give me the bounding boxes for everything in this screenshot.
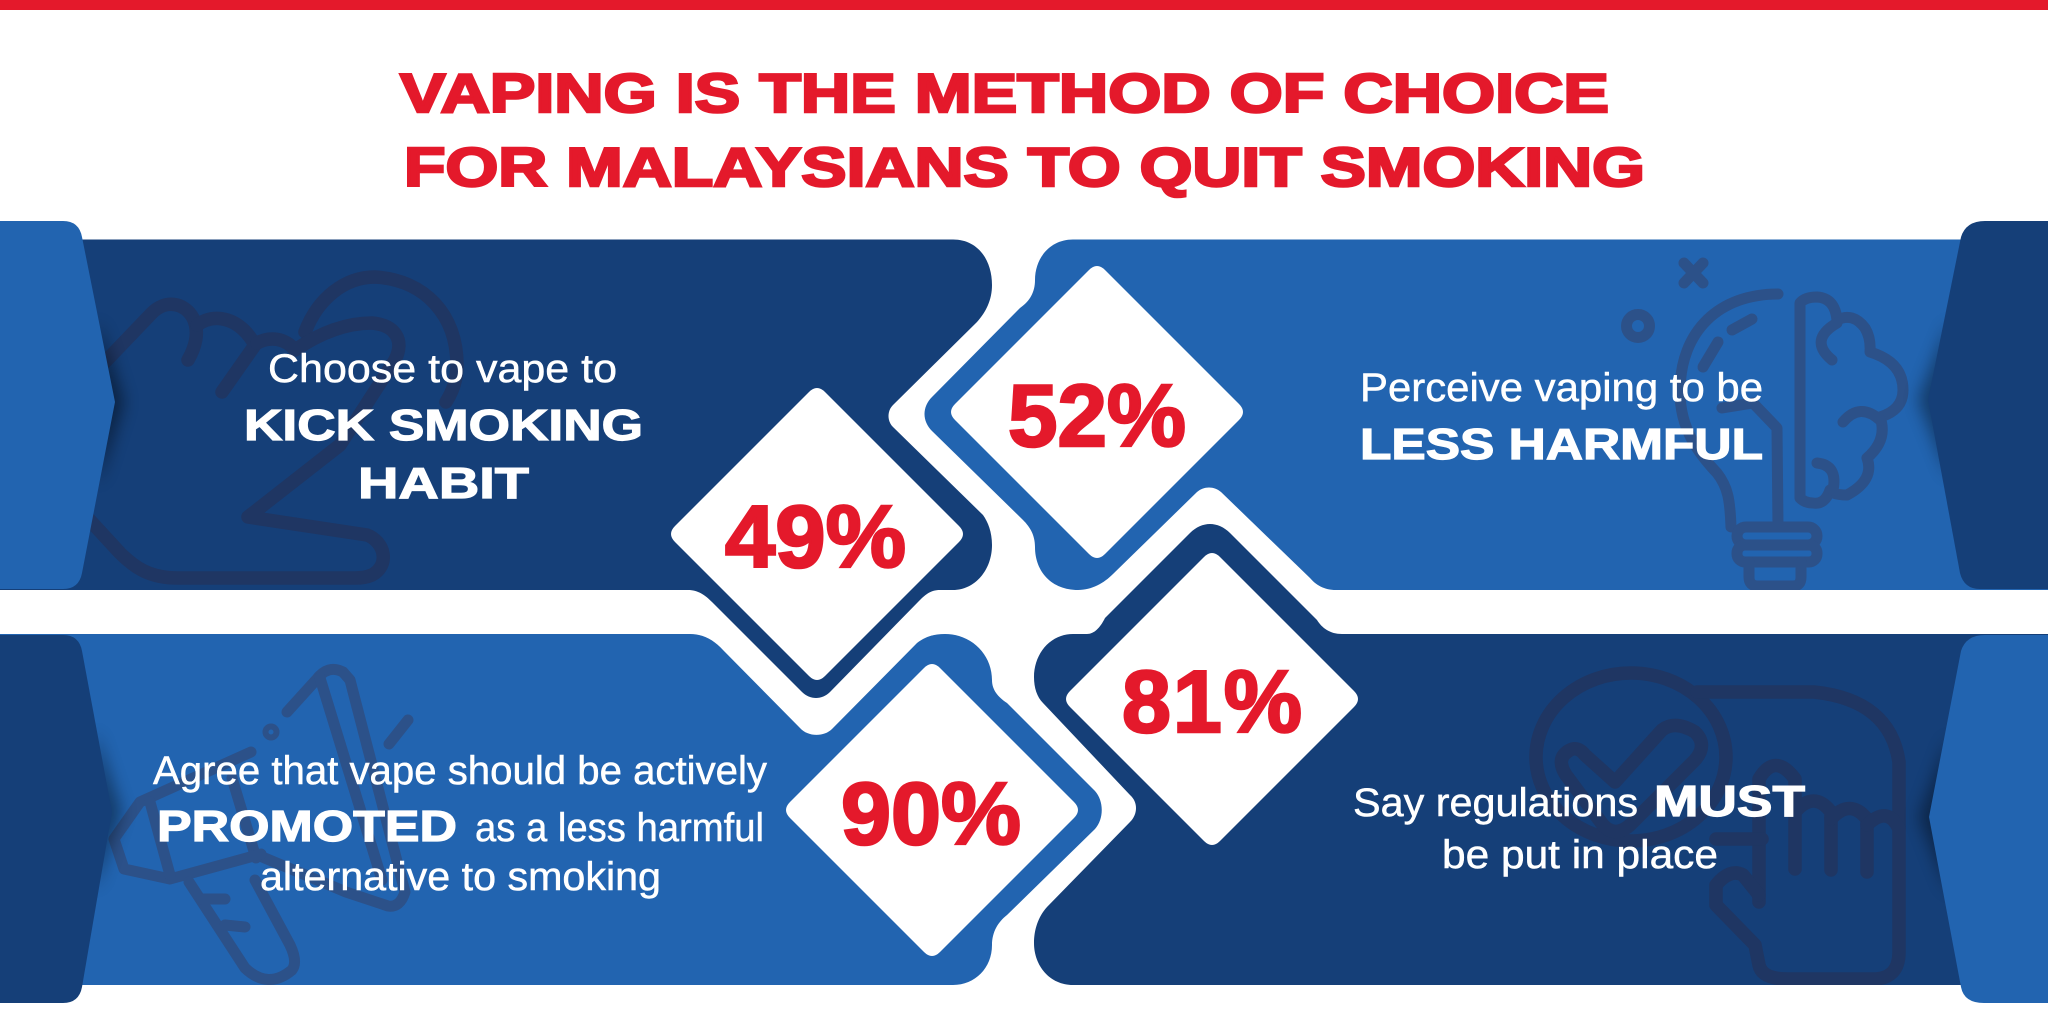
- icon: light bulb and brain: [1626, 263, 1903, 586]
- panel text: [1360, 366, 1763, 469]
- panel text: be put in place: [1442, 833, 1718, 877]
- panel: kick smoking habit: [0, 221, 992, 698]
- panel background: bottom right: [1034, 524, 2048, 985]
- panel background: bottom left: [0, 634, 1102, 985]
- icon: pointing hand: [85, 277, 457, 578]
- panel: less harmful: [924, 221, 2048, 590]
- panel text: [1353, 777, 1805, 877]
- left tab shadow: [95, 730, 122, 890]
- panel text: [244, 347, 643, 508]
- right tab shadow: [1914, 746, 1942, 884]
- diamond: 49%: 49%: [725, 487, 906, 586]
- right tab: [1929, 635, 2048, 1003]
- diamond: 90%: 90%: [841, 764, 1021, 863]
- panel text: HABIT: [358, 459, 529, 508]
- diamond shadow: [1072, 561, 1364, 853]
- left tab: [0, 221, 115, 589]
- diamond shadow: [792, 672, 1084, 964]
- left tab: [0, 635, 112, 1003]
- panel text: Perceive vaping to be: [1360, 366, 1763, 410]
- diamond shadow: [677, 396, 969, 688]
- title: VAPING IS THE METHOD OF CHOICE: [400, 62, 1609, 124]
- panel text: LESS HARMFUL: [1360, 420, 1763, 469]
- panel text: MUST: [1654, 777, 1805, 826]
- panel: regulations: [1034, 524, 2048, 1003]
- panel text: Agree that vape should be actively: [153, 749, 767, 793]
- diamond: 52%: 52%: [1008, 366, 1186, 465]
- panel text: KICK SMOKING: [244, 401, 643, 450]
- panel text: as a less harmful: [475, 806, 764, 850]
- diamond shadow: [957, 274, 1249, 566]
- panel text: PROMOTED: [157, 802, 457, 851]
- left tab shadow: [98, 320, 124, 485]
- diamond: 52%: [951, 266, 1243, 558]
- panel background: top left: [0, 240, 992, 698]
- panel text: Choose to vape to: [268, 347, 617, 391]
- panel text: alternative to smoking: [260, 855, 661, 899]
- diamond: 81%: [1066, 553, 1358, 845]
- panel: actively promoted: [0, 634, 1102, 1003]
- right tab: [1928, 221, 2048, 589]
- diamond: 90%: [786, 664, 1078, 956]
- panel text: Say regulations: [1353, 781, 1638, 825]
- diamond: 81%: 81%: [1122, 652, 1302, 751]
- title: [400, 62, 1645, 198]
- icon: megaphone: [114, 669, 408, 980]
- panel background: top right: [924, 240, 2048, 590]
- diamond: 49%: [671, 388, 963, 680]
- panel text: [153, 749, 767, 899]
- icon: checkmark and hand: [1536, 673, 1899, 979]
- top red bar: [0, 0, 2048, 10]
- title: FOR MALAYSIANS TO QUIT SMOKING: [404, 136, 1645, 198]
- right tab shadow: [1918, 320, 1950, 480]
